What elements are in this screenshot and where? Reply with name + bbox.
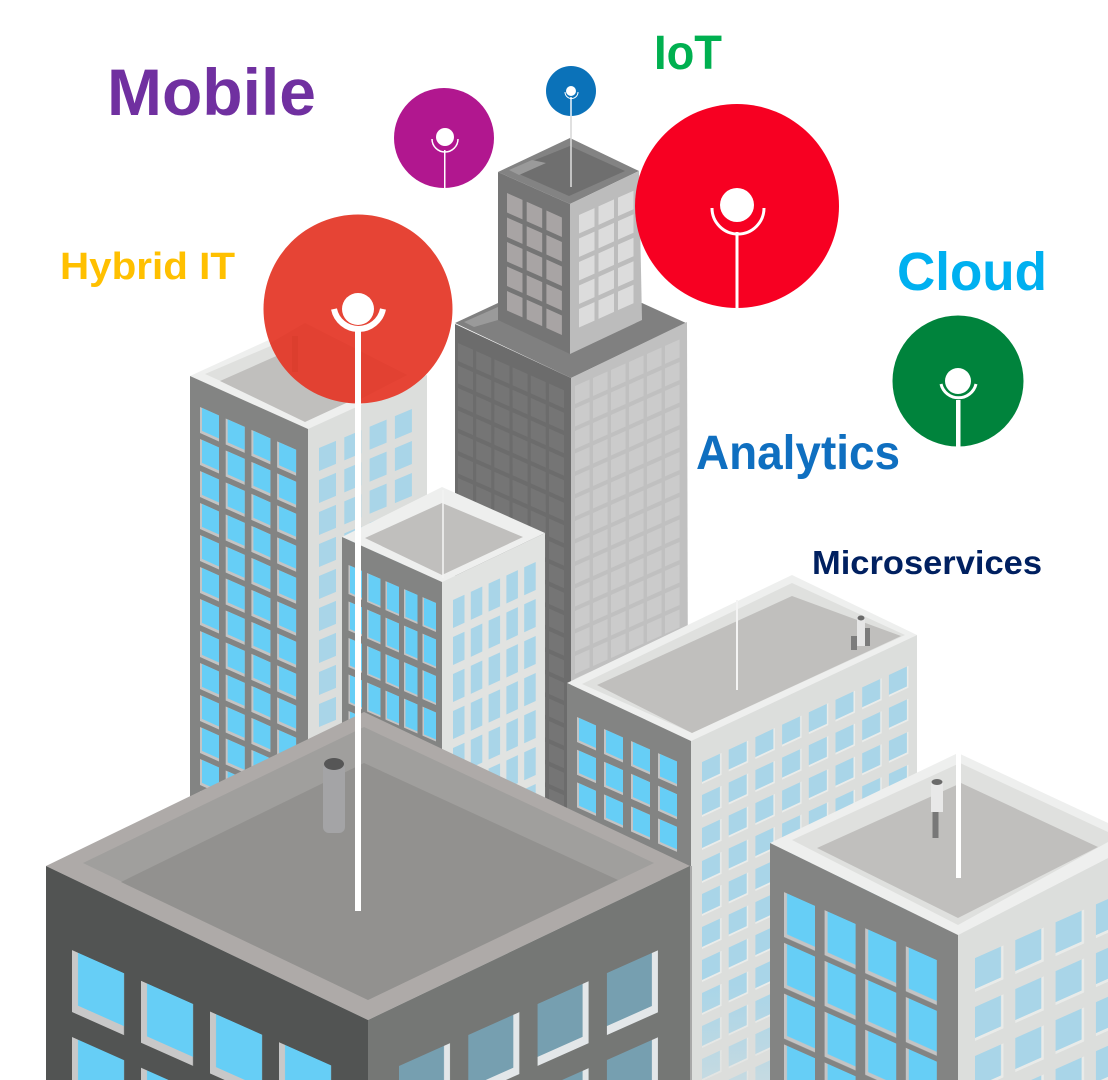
upper tower left face [498, 172, 570, 354]
upper tower roof [498, 138, 639, 204]
antenna signal: green [892, 316, 1024, 447]
label: Mobile: Mobile [107, 55, 316, 129]
label: Analytics: Analytics [696, 427, 900, 480]
roof of right front tower [770, 753, 1108, 935]
antenna signal: Hybrid IT [262, 214, 452, 911]
right face of small tower [442, 533, 545, 850]
right face of middle tower [691, 635, 917, 1080]
left face of right front tower [770, 843, 958, 1080]
roof of front tower [46, 712, 690, 1020]
label: IoT: IoT [654, 27, 722, 80]
left face of skyscraper base [455, 324, 571, 881]
base roof of skyscraper [455, 303, 686, 378]
building: central skyscraper [455, 116, 688, 881]
building: left tall tower [190, 322, 427, 860]
left face of left tower [190, 376, 308, 860]
rooftop vent of right front tower [931, 779, 943, 838]
left face of middle tower [567, 683, 691, 880]
right face of front tower [368, 866, 692, 1080]
upper tower right face [570, 171, 642, 354]
rooftop vents of middle tower [851, 616, 870, 650]
building: right front tower [770, 753, 1108, 1080]
building: small central tower [342, 487, 545, 850]
right face of right front tower [958, 858, 1108, 1080]
antenna pole: Cloud [956, 447, 961, 878]
antenna signal: red [635, 104, 839, 309]
roof of middle tower [567, 575, 917, 741]
label: Cloud: Cloud [897, 242, 1047, 302]
roof of small tower [342, 487, 545, 582]
right face of left tower [308, 375, 427, 830]
label: Microservices: Microservices [812, 544, 1042, 581]
left face of small tower [342, 537, 442, 820]
building: right middle tower [567, 575, 917, 1080]
label: Hybrid IT: Hybrid IT [60, 246, 235, 288]
left face of front tower [46, 866, 368, 1080]
roof of left tower [190, 322, 427, 430]
building: large front tower [46, 712, 692, 1080]
right face of skyscraper base [571, 322, 688, 720]
antenna signal: purple [394, 88, 494, 188]
rooftop pipe of front tower [323, 758, 345, 833]
antenna signal: blue [546, 66, 596, 116]
